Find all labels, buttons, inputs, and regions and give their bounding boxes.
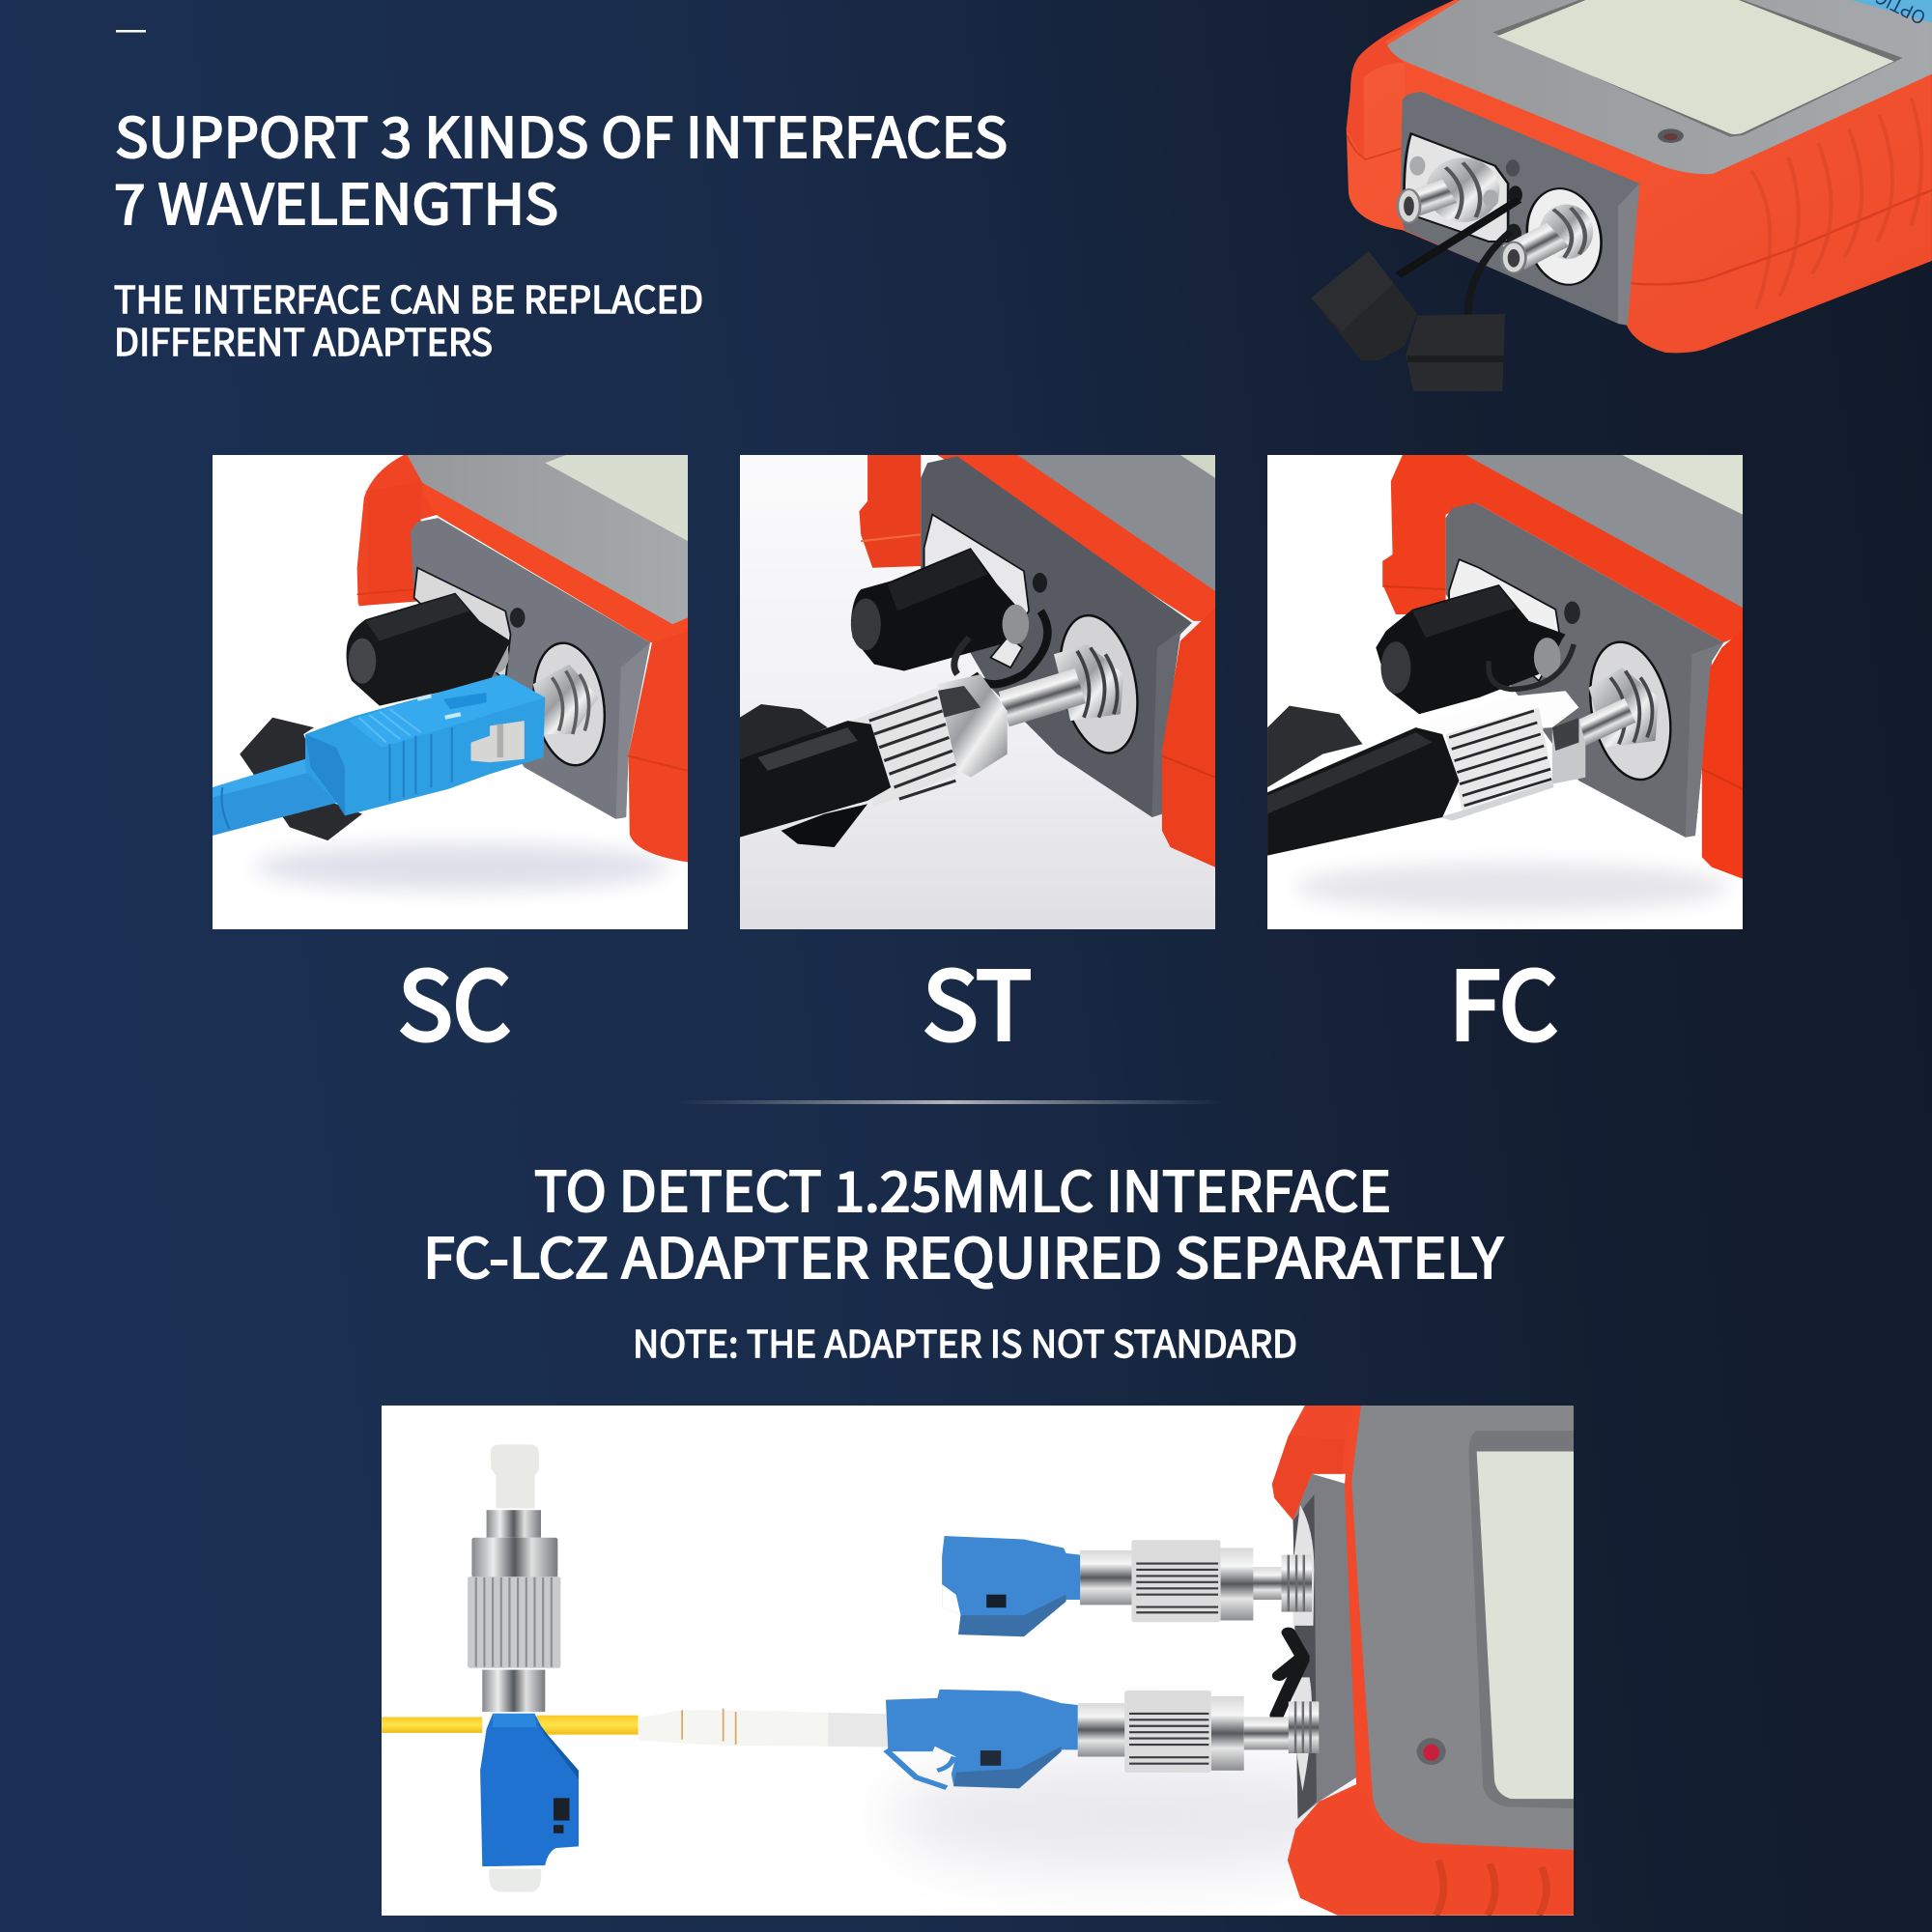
shadow on panel floor — [889, 1758, 1391, 1874]
panel: FC connector photo — [1267, 455, 1743, 929]
product photo: power meter with dust caps — [1311, 0, 1932, 391]
label: FC: FC — [1449, 930, 1558, 1066]
panel: ST connector photo — [740, 455, 1215, 929]
subheading: replaceable adapters: THE INTERFACE CAN BE REPLACED — [114, 270, 703, 324]
adapter and patch cable — [382, 1444, 912, 1892]
subheading: replaceable adapters — [114, 270, 703, 366]
note text: NOTE: THE ADAPTER IS NOT STANDARD — [633, 1315, 1297, 1368]
top dash mark — [116, 30, 146, 33]
heading: support interfaces: 7 WAVELENGTHS — [114, 161, 558, 241]
panel: LC adapter photo — [382, 1406, 1574, 1916]
heading: 1.25mm LC interface — [423, 1149, 1504, 1294]
heading: support interfaces — [114, 95, 1008, 241]
panel: SC connector photo — [213, 455, 688, 929]
heading: support interfaces: SUPPORT 3 KINDS OF INTERFACES — [115, 95, 1008, 174]
label: ST: ST — [923, 930, 1032, 1066]
divider — [676, 1100, 1222, 1104]
label: SC: SC — [398, 930, 511, 1066]
subheading: replaceable adapters: DIFFERENT ADAPTERS — [114, 313, 493, 366]
heading: 1.25mm LC interface: FC-LCZ ADAPTER REQUIRED SEPARATELY — [423, 1215, 1504, 1294]
device and connectors — [886, 1406, 1574, 1916]
heading: 1.25mm LC interface: TO DETECT 1.25MMLC INTERFACE — [534, 1149, 1391, 1228]
